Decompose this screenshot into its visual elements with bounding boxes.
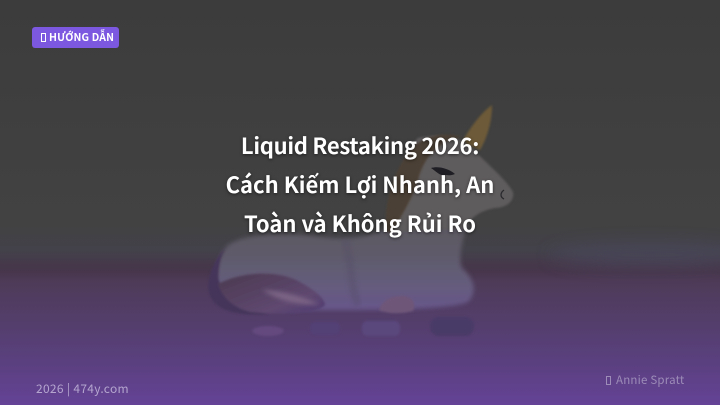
unicorn figurine xyxy=(208,105,513,336)
title: Liquid Restaking 2026: xyxy=(241,129,479,161)
tail highlight xyxy=(262,290,320,304)
photo credit: Annie Spratt xyxy=(616,372,684,388)
mane xyxy=(386,134,462,232)
coins xyxy=(252,326,284,336)
title: Cách Kiếm Lợi Nhanh, An xyxy=(226,168,494,200)
nostril xyxy=(501,190,504,199)
horn xyxy=(463,105,492,150)
footer: year and site: 2026 | 474y.com xyxy=(36,380,129,397)
shadow between haunch and belly xyxy=(345,240,358,305)
badge: guide label xyxy=(32,27,119,48)
tail tuft xyxy=(218,274,325,314)
body xyxy=(216,222,474,310)
title xyxy=(226,129,494,240)
badge: guide label: HƯỚNG DẪN xyxy=(49,30,114,45)
blue wall tint on the right xyxy=(550,243,720,267)
front hoof xyxy=(379,296,414,313)
eye xyxy=(431,167,455,175)
title: Toàn và Không Rủi Ro xyxy=(244,207,476,239)
tail outer edge xyxy=(208,247,268,314)
head and muzzle xyxy=(394,136,513,232)
